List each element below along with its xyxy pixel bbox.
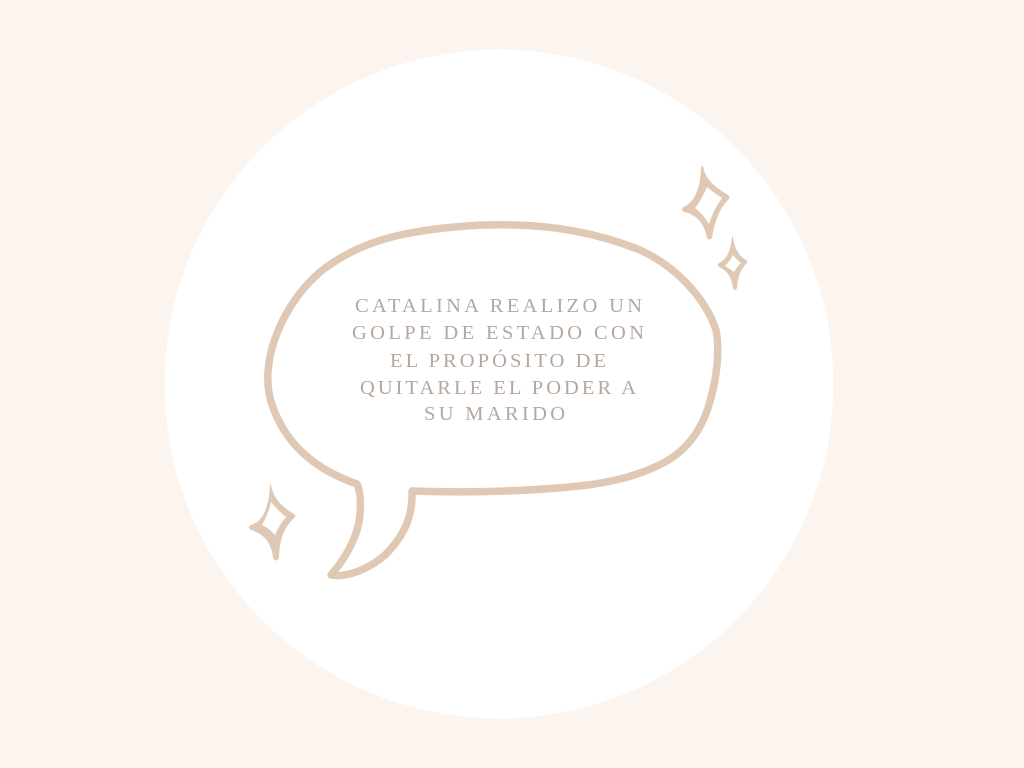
text block: message: QUITARLE EL PODER A: [360, 377, 636, 399]
icon: large sparkle: [682, 166, 730, 240]
icon: small sparkle: [718, 237, 748, 290]
text block: message: EL PROPÓSITO DE: [390, 348, 606, 372]
text block: message: [352, 295, 644, 425]
icon: speech bubble: [268, 225, 718, 576]
text block: message: CATALINA REALIZO UN: [355, 295, 642, 317]
text block: message: GOLPE DE ESTADO CON: [352, 322, 644, 344]
white circle panel: [164, 50, 834, 718]
text block: message: SU MARIDO: [424, 403, 565, 425]
icon: lower left sparkle: [249, 484, 296, 560]
